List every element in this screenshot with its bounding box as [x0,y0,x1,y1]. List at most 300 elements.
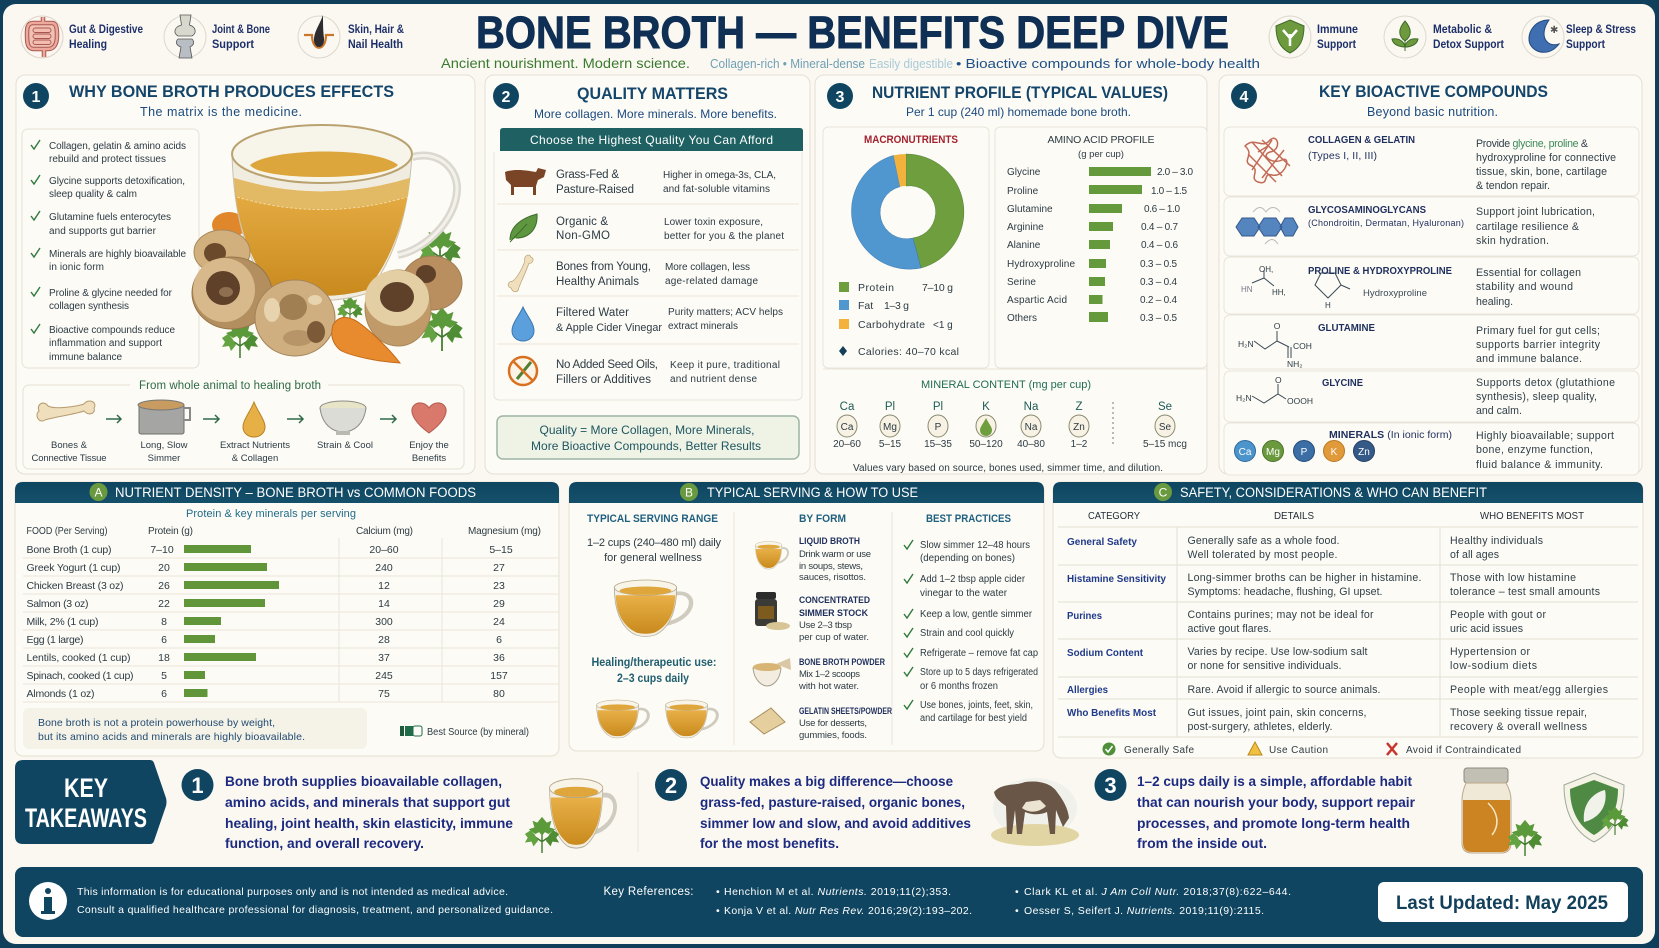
icon: jar [1462,768,1542,856]
compound: proline: HN [1241,285,1253,294]
last updated [1378,882,1628,922]
comparison table: 6 [496,634,502,646]
mineral content: 1–2 [1071,439,1088,450]
comparison table: 240 [375,562,393,574]
safety table: Contains purines; may not be ideal for [1188,609,1374,621]
safety table: Symptoms: headache, flushing, GI upset. [1188,586,1382,598]
best practices column: Refrigerate – remove fat cap [920,648,1038,659]
donut chart [851,154,964,269]
quality rows text: Bones from Young, [556,261,651,273]
safety table: post-surgery, athletes, elderly. [1188,721,1332,733]
amino acid chart: Glycine [1007,167,1041,178]
quality rows text: Pasture-Raised [556,184,634,196]
comparison table: 5 [161,670,167,682]
compound: collagen: tissue, skin, bone, cartilage [1476,166,1607,178]
checklist: sleep quality & calm [49,189,137,200]
mineral content: Z [1075,401,1083,413]
mineral content: Mg [883,422,897,433]
subheading: More collagen. More minerals. More benefits. [534,107,777,121]
best practices column: vinegar to the water [920,588,1008,599]
disclaimer: This information is for educational purposes only and is not intended as medical advice. [77,886,508,898]
safety legend: Avoid if Contraindicated [1406,745,1521,756]
by form column: Use 2–3 tbsp [799,620,852,631]
by form column: Drink warm or use [799,549,871,560]
amino acid chart: 0.3 – 0.5 [1140,313,1177,324]
quality rows text: Healthy Animals [556,276,639,288]
amino acid chart: AMINO ACID PROFILE [1048,134,1154,146]
takeaway 2: grass-fed, pasture-raised, organic bones, [700,794,965,810]
comparison table: 28 [378,634,390,646]
compound: minerals: fluid balance & immunity. [1476,459,1603,471]
disclaimer [77,886,553,916]
subheading: Beyond basic nutrition. [1367,105,1498,119]
step labels: Benefits [412,453,446,464]
takeaway 1: Bone broth supplies bioavailable collagen, [225,773,502,789]
compound: minerals: Ca [1239,447,1252,458]
comparison table: 22 [158,598,170,610]
comparison table: 36 [493,652,505,664]
safety table: Those seeking tissue repair, [1450,707,1587,719]
compound: glycine: OOOH [1287,396,1313,406]
comparison table: 8 [161,616,167,628]
amino acid chart: 0.3 – 0.4 [1140,277,1177,288]
quality rows text: Lower toxin exposure, [664,217,763,228]
compound: glycine: GLYCINE [1322,377,1363,389]
takeaway 2: simmer low and slow, and avoid additives [700,815,971,831]
serving range column: 1–2 cups (240–480 ml) daily [587,537,722,549]
arrow [203,415,219,423]
compound: glutamine: and immune balance. [1476,353,1582,365]
label: immune: Immune [1317,24,1358,36]
icon: leaves [1384,16,1426,58]
label: sleep: Support [1566,39,1605,51]
quality rows text: More collagen, less [665,262,750,273]
legend [839,282,959,358]
comparison table: Calcium (mg) [356,526,413,537]
legend: 7–10 g [922,282,953,294]
label: gut: Healing [69,39,107,51]
subheading: Per 1 cup (240 ml) homemade bone broth. [906,105,1131,119]
checklist: immune balance [49,352,122,363]
serving range column: for general wellness [604,552,702,564]
step labels: Strain & Cool [317,440,373,451]
number 4: 4 [1240,89,1249,106]
quality rows text: Non-GMO [556,230,610,242]
comparison table: Milk, 2% (1 cup) [26,616,98,628]
icon: shield [1564,773,1628,842]
amino acid chart: 1.0 – 1.5 [1151,186,1187,197]
compound: collagen: COLLAGEN & GELATIN [1308,134,1415,146]
quality rows text: No Added Seed Oils, [556,359,658,371]
comparison table: 37 [378,652,390,664]
compound: minerals: Mg [1266,447,1280,458]
compound: minerals: bone, enzyme function, [1476,444,1593,456]
best practices column: Slow simmer 12–48 hours [920,540,1030,551]
compound: proline: healing. [1476,296,1513,308]
icon: bone [505,254,538,293]
amino acid chart: Hydroxyproline [1007,259,1075,270]
panel: quality matters [485,75,810,474]
icon: powder [753,658,791,686]
comparison table: 23 [493,580,505,592]
quality rows text: & Apple Cider Vinegar [556,322,662,334]
compound: minerals [1224,423,1639,475]
step labels: Enjoy the [409,440,449,451]
comparison table: Almonds (1 oz) [26,688,94,700]
mineral content: Pl [885,401,895,413]
mineral content: Values vary based on source, bones used, simmer time, and dilution. [853,463,1163,474]
mineral content: P [935,422,942,433]
safety table [1058,510,1638,737]
icon: gut [21,16,63,58]
references: • [716,886,720,898]
safety table: CATEGORY [1088,510,1140,522]
safety table: Rare. Avoid if allergic to source animals. [1188,684,1380,696]
drop icon [243,402,265,437]
serving range column: Healing/therapeutic use: [592,657,716,669]
by form column: LIQUID BROTH [799,536,860,547]
step labels: & Collagen [232,453,278,464]
label: gut [69,24,143,51]
takeaway 3: processes, and promote long-term health [1137,815,1410,831]
by form column: sauces, risottos. [799,572,866,583]
amino acid chart: 2.0 – 3.0 [1157,167,1193,178]
references: Clark KL et al. J Am Coll Nutr. 2018;37(8):622–644. [1024,886,1291,898]
compound: proline: HH, [1272,288,1286,297]
mineral content: 5–15 mcg [1143,439,1187,450]
quality rows text: Fillers or Additives [556,374,651,386]
header [1053,482,1643,503]
mineral content: 15–35 [924,439,952,450]
best practices column [904,513,1038,724]
quality equation box [497,416,799,459]
comparison table: FOOD (Per Serving) [26,526,108,537]
step labels: Bones & [51,440,88,451]
best practices column: Add 1–2 tbsp apple cider [920,574,1026,585]
mineral content: Ca [841,422,854,433]
quality rows text: Higher in omega-3s, CLA, [663,170,776,181]
mineral content: Ca [840,401,855,413]
bone icon [37,401,95,421]
safety table: recovery & overall wellness [1450,721,1587,733]
comparison table: 245 [375,670,393,682]
compound: minerals: Zn [1358,447,1370,458]
comparison table: Protein (g) [148,526,193,537]
bowl icon [320,401,366,435]
icon: grazing cow [991,778,1079,846]
subtitle [441,56,1260,71]
mineral content: Pl [933,401,943,413]
comparison table: 29 [493,598,505,610]
heading: KEY BIOACTIVE COMPOUNDS [1319,82,1548,101]
header: SAFETY, CONSIDERATIONS & WHO CAN BENEFIT [1180,485,1487,500]
mineral content: 20–60 [833,439,861,450]
icon: leaf [510,214,537,242]
label: joint: Support [212,39,254,51]
safety table: Allergies [1067,684,1108,696]
banner: Choose the Highest Quality You Can Afford [530,133,773,147]
header [15,482,559,503]
label: immune: Support [1317,39,1356,51]
panel: nutrient profile [815,75,1207,474]
compound: collagen: & tendon repair. [1476,180,1550,192]
by form column: Use for desserts, [799,718,867,729]
banner [500,128,803,151]
comparison table: Chicken Breast (3 oz) [26,580,124,592]
compound: glycine: H₂N [1236,393,1252,403]
by form column: Mix 1–2 scoops [799,669,860,680]
references: Key References: [604,886,694,898]
safety table: Histamine Sensitivity [1067,573,1166,585]
quality rows text: Filtered Water [556,307,629,319]
heart icon [412,403,446,433]
by form column: BONE BROTH POWDER [799,657,885,668]
safety table: WHO BENEFITS MOST [1480,510,1585,522]
safety table: Those with low histamine [1450,572,1576,584]
legend: Fat [858,300,873,312]
compound: GAGs: skin hydration. [1476,235,1549,247]
number 3 [827,83,853,109]
takeaway 3: that can nourish your body, support repair [1137,794,1416,810]
by form column: BY FORM [799,513,846,525]
subtitle: • Bioactive compounds for whole-body health [956,56,1260,71]
by form column: CONCENTRATED [799,595,870,606]
badge [15,760,166,844]
quality rows text: Purity matters; ACV helps [668,307,783,318]
checklist: rebuild and protect tissues [49,154,166,165]
safety table: Generally safe as a whole food. [1188,535,1340,547]
safety table: Varies by recipe. Use low-sodium salt [1188,646,1368,658]
amino acid chart: 0.4 – 0.7 [1141,222,1178,233]
number 2: 2 [502,89,511,106]
checklist: Proline & glycine needed for [49,288,173,299]
number 2 [493,83,519,109]
subheading: The matrix is the medicine. [140,105,302,119]
label: metabolic: Metabolic & [1433,24,1492,36]
step labels [32,440,449,464]
quality rows text: and fat-soluble vitamins [663,184,770,195]
takeaway 3: 1–2 cups daily is a simple, affordable habit [1137,773,1412,789]
comparison table: 300 [375,616,393,628]
references: Oesser S, Seifert J. Nutrients. 2019;11(9):2115. [1024,905,1264,917]
badge: KEY [64,773,108,803]
icon: cup with parsley [525,779,615,853]
by form column [750,513,892,741]
amino acid chart: Serine [1007,277,1036,288]
mineral content: K [982,401,990,413]
checklist: Glycine supports detoxification, [49,176,185,187]
references: • [716,905,720,917]
comparison table: 14 [378,598,390,610]
amino acid chart: Others [1007,313,1037,324]
label: metabolic: Detox Support [1433,39,1504,51]
label: joint [212,24,270,51]
takeaway 2: 2 [665,773,677,798]
heading: NUTRIENT PROFILE (TYPICAL VALUES) [872,83,1168,102]
mineral content: Se [1158,401,1172,413]
compound: GAGs: GLYCOSAMINOGLYCANS [1308,204,1426,216]
subtitle: Collagen-rich • Mineral-dense [710,56,865,71]
step labels: Long, Slow [140,440,188,451]
comparison table: 26 [158,580,170,592]
compound: glutamine: O [1274,321,1281,331]
mineral content: 50–120 [969,439,1003,450]
best practices column: BEST PRACTICES [926,513,1011,525]
quality equation box: Quality = More Collagen, More Minerals, [540,423,754,437]
panel: why bone broth [16,75,475,474]
compound: proline: Essential for collagen [1476,267,1581,279]
pot icon [138,400,190,434]
note box: but its amino acids and minerals are highly bioavailable. [38,731,305,743]
icon: two cups [597,700,717,738]
compound: proline: stability and wound [1476,281,1573,293]
mineral content [823,369,1207,474]
legend: Protein [858,282,894,294]
mineral content: Na [1025,422,1038,433]
heading: QUALITY MATTERS [577,84,728,103]
note box [23,708,367,749]
subtitle: Protein & key minerals per serving [186,508,356,520]
label: hair: Nail Health [348,39,403,51]
comparison table: 7–10 [150,544,174,556]
best practices column: (depending on bones) [920,553,1015,564]
compound: collagen: (Types I, II, III) [1308,150,1377,162]
quality rows text: Grass-Fed & [556,169,619,181]
subtitle: Easily digestible [869,56,953,71]
takeaway 1: 1 [191,773,204,798]
best practices column: Keep a low, gentle simmer [920,609,1033,620]
amino acid chart: Aspartic Acid [1007,295,1067,306]
legend: Calories: 40–70 kcal [858,346,959,358]
safety table: Hypertension or [1450,646,1530,658]
header: B [685,486,693,500]
compound: collagen [1224,127,1639,196]
mineral content: Zn [1073,422,1085,433]
serving range column [587,513,722,738]
amino acid chart [995,127,1207,368]
checklist: Minerals are highly bioavailable [49,249,186,260]
comparison table: 12 [378,580,390,592]
compound: minerals: MINERALS (In ionic form) [1329,429,1452,441]
header icons right [1269,16,1636,58]
amino acid chart: Proline [1007,186,1039,197]
best practices column: Strain and cool quickly [920,628,1014,639]
by form column: SIMMER STOCK [799,608,868,619]
safety table: Who Benefits Most [1067,707,1156,719]
references: • [1015,905,1019,917]
legend: Carbohydrate [858,319,925,331]
safety table: of all ages [1450,549,1499,561]
compound: GAGs: cartilage resilience & [1476,221,1579,233]
arrow [106,415,121,423]
comparison table: 80 [493,688,505,700]
icon: jar [755,592,790,630]
illustration: broth mug with bones [192,125,463,363]
safety table: active gout flares. [1188,623,1272,635]
checklist: and supports gut barrier [49,226,157,237]
by form column: with hot water. [798,681,859,692]
icon: moon: ✱ [1550,25,1558,36]
legend: 1–3 g [884,300,909,312]
amino acid chart: Arginine [1007,222,1044,233]
serving range column: 2–3 cups daily [617,673,690,685]
checklist: Bioactive compounds reduce [49,325,175,336]
comparison table [23,526,559,702]
process: from animal to broth: From whole animal to healing broth [139,380,321,392]
takeaway 2: Quality makes a big difference—choose [700,773,953,789]
process: from animal to broth [23,378,464,469]
by form column: gummies, foods. [799,730,867,741]
amino acid chart: Glutamine [1007,204,1053,215]
safety table: Healthy individuals [1450,535,1543,547]
mineral content: 5–15 [879,439,902,450]
header: C [1159,486,1168,500]
icon: liquid broth [755,542,788,569]
quality rows text: age-related damage [665,276,758,287]
compound: GAGs: Support joint lubrication, [1476,206,1595,218]
amino acid chart: (g per cup) [1078,149,1124,160]
references: • [1015,886,1019,898]
quality rows text: Organic & [556,216,608,228]
safety legend [1102,742,1521,756]
references: Henchion M et al. Nutrients. 2019;11(2);353. [724,886,951,898]
checklist [22,129,199,368]
by form column: per cup of water. [799,632,869,643]
compound: glycine [1224,371,1639,422]
comparison table: Spinach, cooked (1 cup) [26,670,134,682]
safety table: People with meat/egg allergies [1450,684,1608,696]
takeaway 1 [182,769,513,851]
quality rows text: Keep it pure, traditional [670,360,780,371]
compound: minerals: Highly bioavailable; support [1476,430,1614,442]
safety table: Gut issues, joint pain, skin concerns, [1188,707,1366,719]
number 1 [23,83,49,109]
amino acid chart: 0.4 – 0.6 [1141,240,1178,251]
takeaway 2 [655,769,971,851]
checklist: Collagen, gelatin & amino acids [49,141,186,152]
key takeaways section [15,760,1628,856]
serving range column: TYPICAL SERVING RANGE [587,513,718,525]
mineral content: MINERAL CONTENT (mg per cup) [921,379,1091,391]
step labels: Connective Tissue [32,453,106,464]
quality list [494,152,802,400]
compound: proline: PROLINE & HYDROXYPROLINE [1308,265,1452,277]
compound: GAGs: (Chondroitin, Dermatan, Hyaluronan) [1308,218,1464,228]
compound: proline [1224,257,1639,314]
last updated: Last Updated: May 2025 [1396,893,1608,914]
mineral content: Na [1024,401,1039,413]
comparison table: Egg (1 large) [26,634,84,646]
panel B: typical serving [569,482,1044,751]
icon: shield [1269,16,1311,58]
quality equation box: More Bioactive Compounds, Better Results [531,439,761,453]
references: Konja V et al. Nutr Res Rev. 2016;29(2):193–202. [724,905,972,917]
takeaway 3: 3 [1104,773,1117,798]
label: hair [348,24,404,51]
comparison table: Salmon (3 oz) [26,598,88,610]
checklist: collagen synthesis [49,301,129,312]
compound: glycine: O [1275,375,1282,385]
icon: moon [1522,16,1564,58]
number 3: 3 [836,89,845,106]
arrow [380,415,396,423]
takeaway 1: healing, joint health, skin elasticity, immune [225,815,513,831]
compound: collagen: Provide glycine, proline & [1476,138,1588,150]
comparison table: Bone Broth (1 cup) [26,544,112,556]
comparison table: 6 [161,688,167,700]
takeaway 2: for the most benefits. [700,835,839,851]
safety table: or none for sensitive individuals. [1188,660,1342,672]
